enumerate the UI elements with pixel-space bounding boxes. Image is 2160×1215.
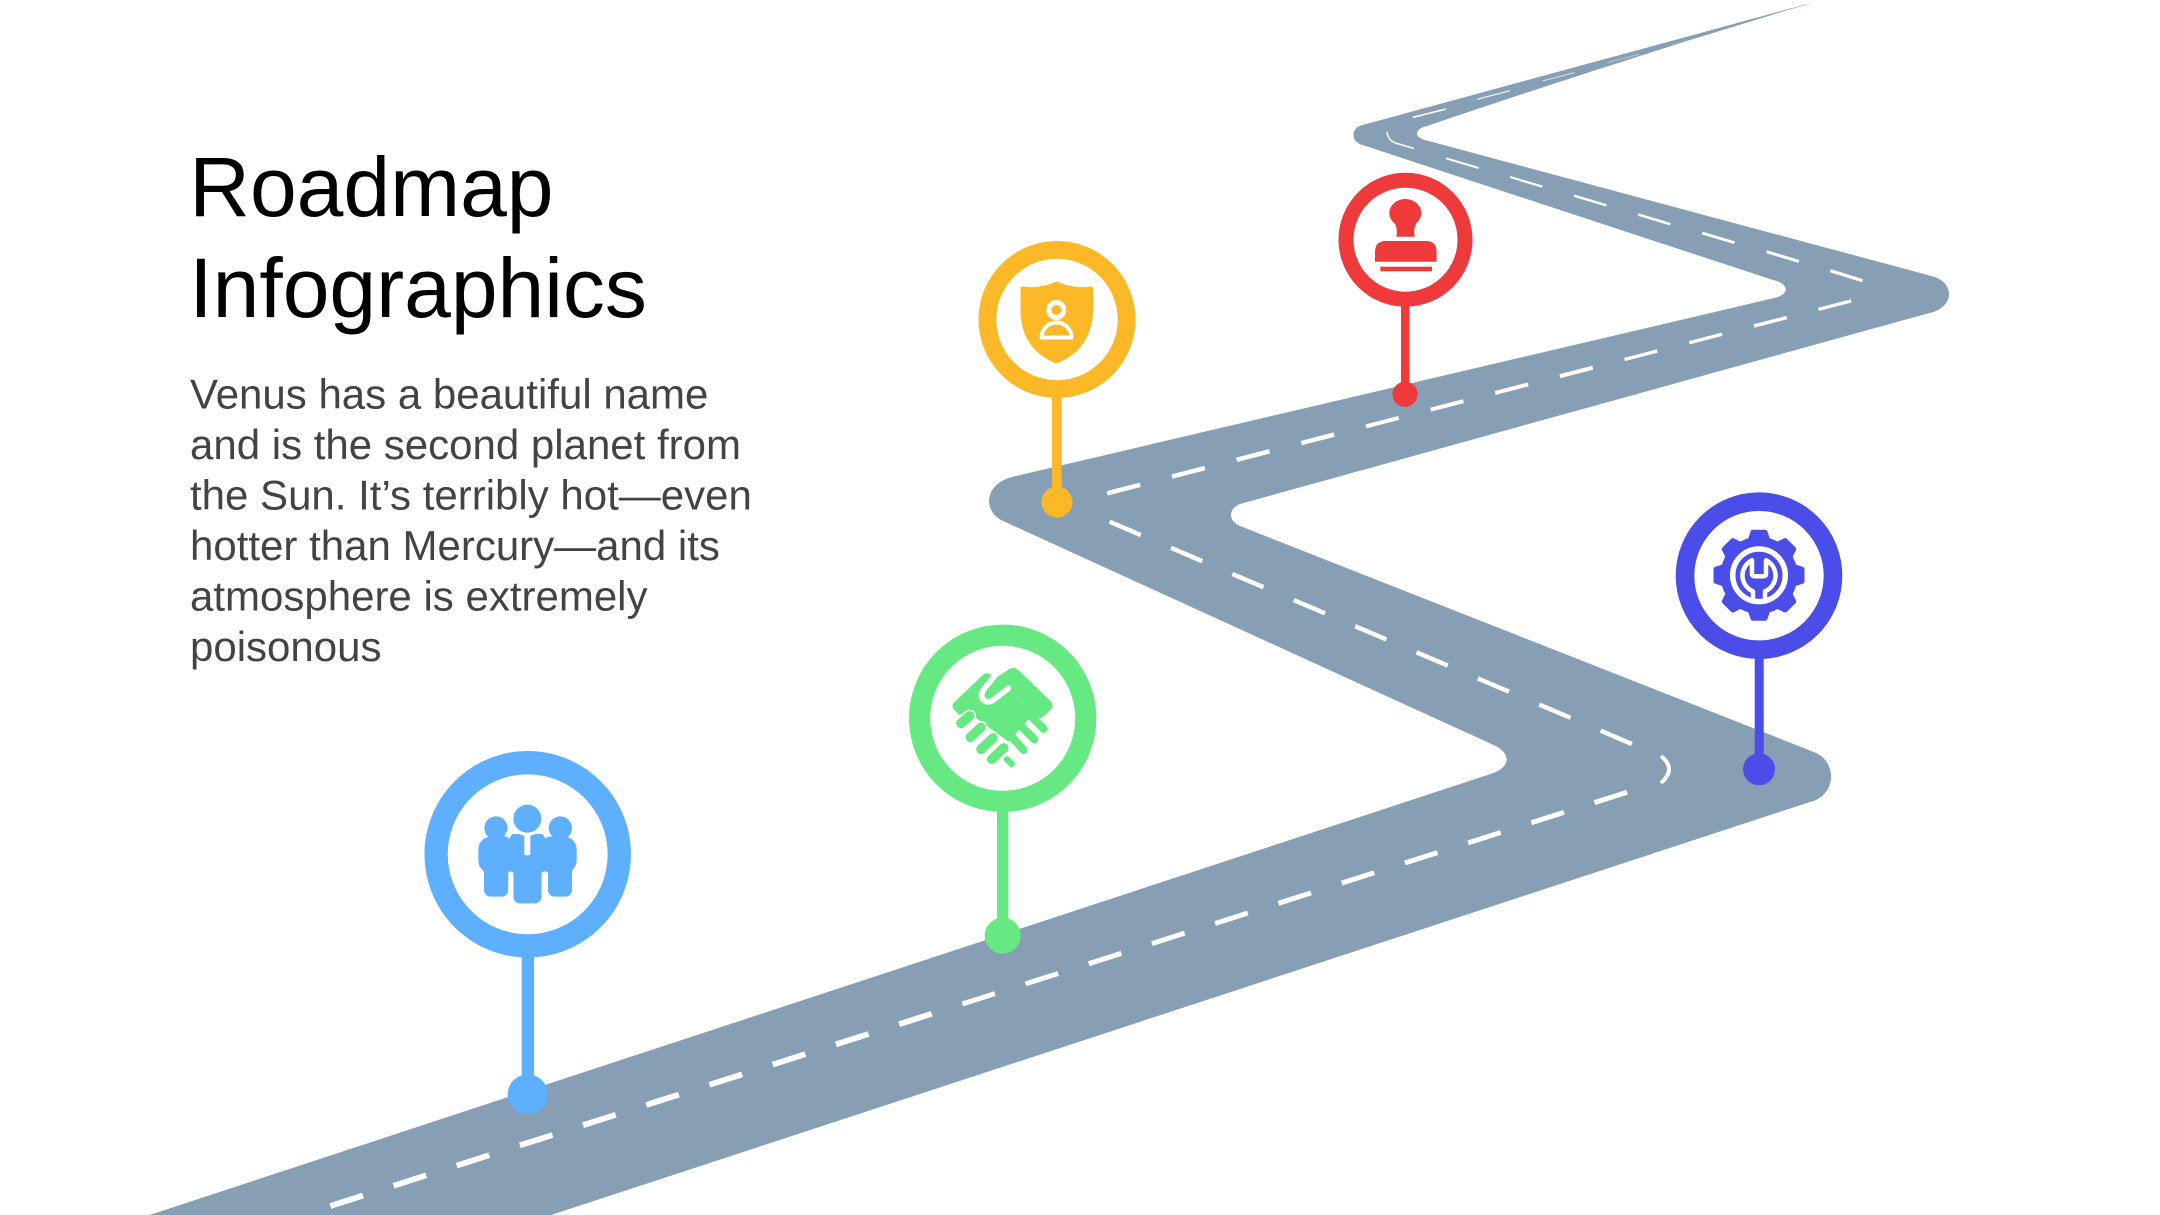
body text: Venus has a beautiful name	[190, 370, 708, 418]
pin 1: team (blue)	[436, 763, 619, 1114]
title: Roadmap	[189, 140, 554, 234]
body text	[190, 370, 752, 670]
icon: rubber stamp	[1375, 199, 1437, 271]
icon: team of people	[478, 801, 577, 903]
icon: gear with wrench	[1714, 530, 1804, 621]
lane markings	[330, 36, 1862, 1206]
right fingers	[1010, 715, 1044, 750]
body text: the Sun. It’s terribly hot—even	[190, 472, 752, 518]
icon: shield with person	[1020, 282, 1093, 364]
title	[189, 140, 647, 335]
pin 3: shield (yellow)	[987, 250, 1127, 518]
pin 4: stamp (red)	[1346, 180, 1465, 407]
body text: poisonous	[190, 623, 381, 670]
icon: handshake	[952, 668, 1052, 764]
pin 2: handshake (green)	[920, 635, 1086, 954]
body text: atmosphere is extremely	[190, 572, 648, 620]
pin 5: gear and wrench (indigo)	[1685, 502, 1833, 785]
left fingers	[961, 716, 1012, 764]
body text: hotter than Mercury—and its	[190, 522, 720, 569]
title: Infographics	[189, 241, 647, 335]
body text: and is the second planet from	[190, 421, 741, 468]
